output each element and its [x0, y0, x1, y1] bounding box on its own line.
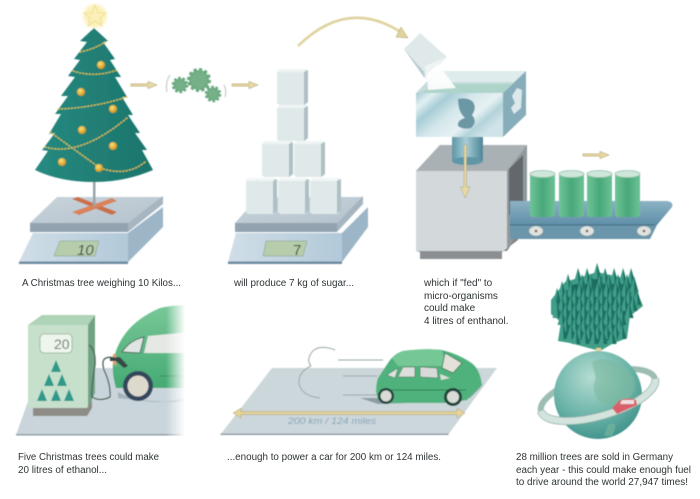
- arrow: conveyor direction: [583, 152, 609, 158]
- conveyor belt: [510, 201, 672, 239]
- icon: sugar bag pouring: [404, 33, 456, 90]
- sugar cube pyramid: [246, 69, 341, 214]
- arrow: distance: [233, 408, 465, 418]
- arrow: tree to gears: [131, 82, 157, 88]
- fuel hose: [89, 345, 118, 400]
- green car rear: [113, 305, 190, 401]
- ornaments: [58, 61, 117, 172]
- fuel pump: [28, 315, 95, 416]
- garlands: [45, 41, 145, 171]
- jars of ethanol: [530, 170, 640, 217]
- globe with ring: [541, 351, 655, 439]
- hopper neck: [452, 137, 483, 165]
- icon: recycling symbol: [511, 88, 522, 114]
- illustration: scale under the sugar: [228, 196, 368, 264]
- fade: [166, 300, 185, 440]
- caption: micro-organisms: could make: [424, 303, 476, 314]
- icon: display reading 10: [54, 241, 99, 259]
- caption: sugar: will produce 7 kg of sugar...: [233, 278, 354, 289]
- car shadow: [360, 384, 484, 404]
- christmas tree: [35, 28, 153, 182]
- rollers: [529, 226, 651, 236]
- distance label: 200 km / 124 miles: [287, 416, 376, 427]
- green car: [376, 349, 482, 406]
- icon: gears: [166, 70, 226, 100]
- icon: display reading 7: 7: [293, 242, 301, 259]
- map of Germany with trees: [551, 263, 643, 351]
- icon: red car: [612, 398, 637, 414]
- icon: display reading 10: 10: [77, 242, 94, 259]
- icon: micro-organism: [458, 98, 475, 129]
- caption: micro-organisms: micro-organisms: [424, 291, 498, 302]
- nozzle: [110, 357, 128, 368]
- machine block: [416, 145, 527, 259]
- arrow: down: [460, 145, 470, 198]
- caption: five trees: 20 litres of ethanol...: [18, 465, 107, 476]
- illustration: scale under the tree: [19, 196, 163, 264]
- caption: micro-organisms: 4 litres of enthanol.: [424, 316, 508, 327]
- arrow: curved arrow to hopper: [298, 18, 408, 46]
- icon: star: [80, 1, 110, 31]
- icon: tree trunk: [93, 178, 96, 206]
- caption: five trees: Five Christmas trees could make: [18, 452, 159, 463]
- caption: micro-organisms: which if "fed" to: [423, 278, 493, 289]
- icon: wooden cross tree stand: [72, 197, 117, 215]
- caption: Germany: each year - this could make enough fuel: [516, 465, 691, 476]
- arrow: Germany to globe: [593, 348, 604, 359]
- caption: car range: ...enough to power a car for 200 km or 124 miles.: [227, 452, 441, 463]
- arrow: gears to sugar: [232, 82, 258, 88]
- tree icons: [37, 360, 74, 401]
- hopper tank: [416, 71, 526, 137]
- speed lines: [299, 347, 383, 398]
- caption: tree: A Christmas tree weighing 10 Kilos...: [22, 278, 181, 289]
- display reading 20: 20: [54, 336, 70, 352]
- caption: Germany: to drive around the world 27,947 times!: [516, 477, 688, 488]
- caption: Germany: 28 million trees are sold in Germany: [516, 452, 673, 463]
- illustration: ground and pump and car: [16, 300, 205, 440]
- road plate: [220, 347, 497, 435]
